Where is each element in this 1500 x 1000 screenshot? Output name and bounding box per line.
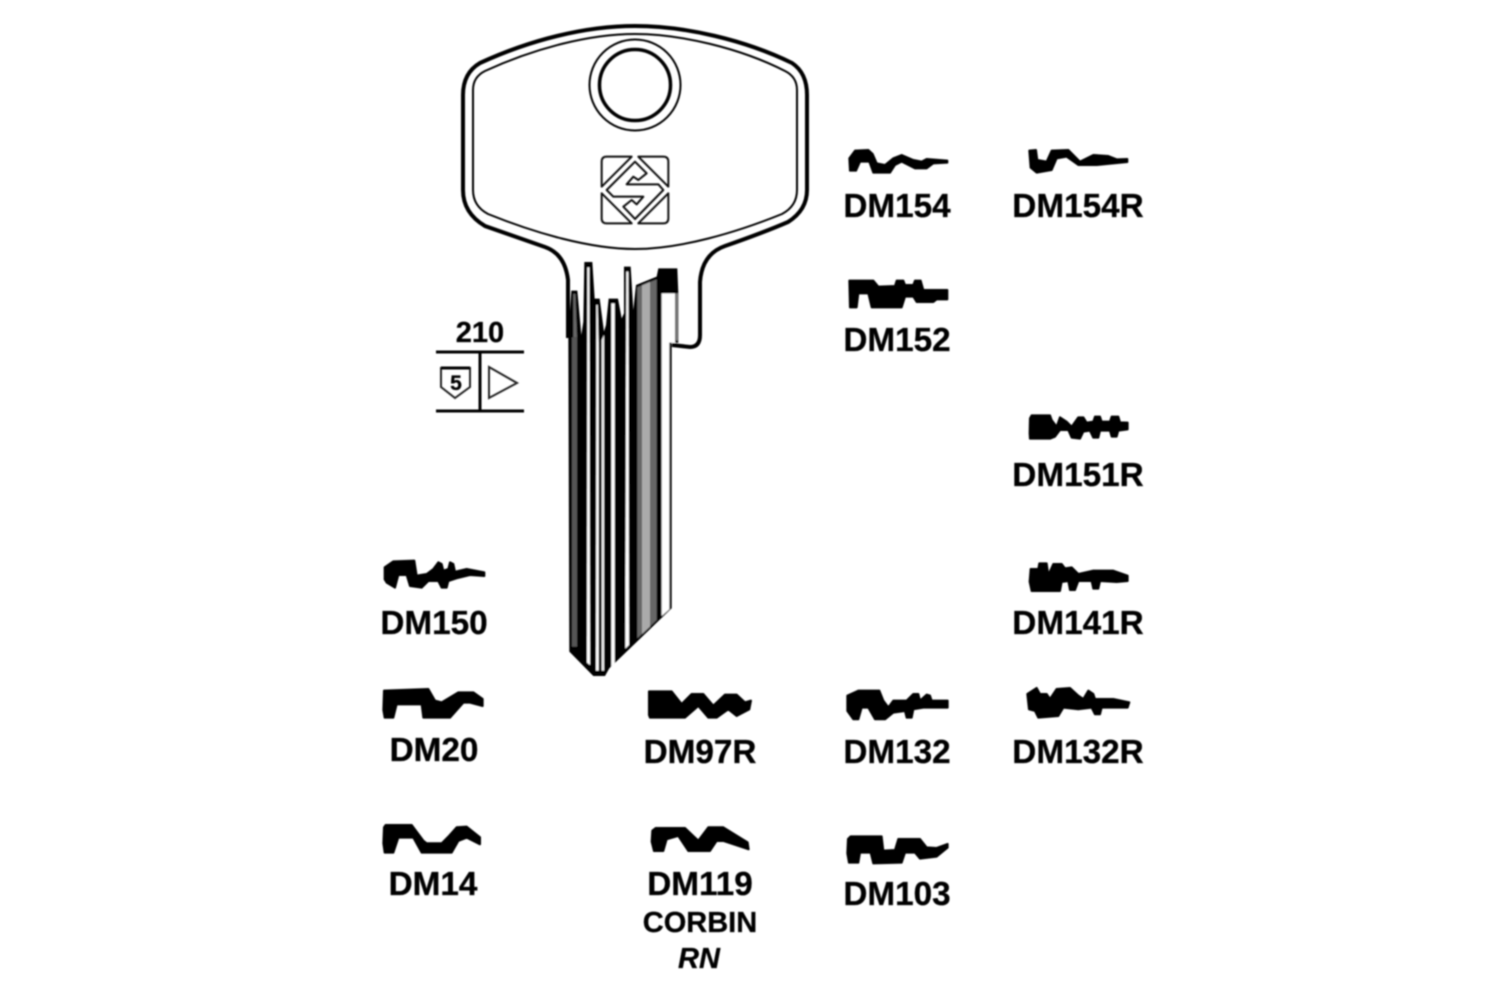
profile DM132R (1012, 688, 1144, 771)
profile DM154 (843, 150, 951, 225)
profile DM20: DM20 (390, 732, 478, 769)
shield icon: 5 (450, 372, 462, 395)
profile DM151R: DM151R (1012, 457, 1144, 494)
profile DM141R (1012, 563, 1144, 642)
triangle icon (489, 367, 517, 398)
profile DM150 (380, 561, 488, 642)
profile DM14 (383, 825, 480, 903)
profile DM152 (843, 281, 951, 359)
key head outline (463, 26, 807, 347)
profile DM154R (1012, 150, 1144, 225)
profile DM119 with CORBIN RN: RN (678, 943, 721, 975)
key illustration (463, 26, 807, 676)
profile DM97R: DM97R (644, 734, 756, 771)
profile DM119 with CORBIN RN (643, 827, 757, 975)
number 210: 210 (456, 317, 504, 349)
profile DM151R (1012, 415, 1144, 494)
profile DM150: DM150 (380, 605, 488, 642)
profile DM119 with CORBIN RN: CORBIN (643, 907, 757, 939)
profile DM154R: DM154R (1012, 188, 1144, 225)
profile DM154: DM154 (843, 188, 951, 225)
cut code symbol 210 (436, 317, 524, 411)
profile DM103 (843, 836, 951, 913)
key blade (568, 262, 678, 676)
profile DM152: DM152 (843, 322, 951, 359)
symbol frame (436, 352, 524, 411)
profile DM103: DM103 (843, 876, 951, 913)
profile DM132 (843, 691, 951, 771)
profile DM132R: DM132R (1012, 734, 1144, 771)
profile DM141R: DM141R (1012, 605, 1144, 642)
profile DM20 (383, 689, 483, 769)
logo (602, 157, 668, 223)
profile DM14: DM14 (389, 866, 478, 903)
profile DM132: DM132 (843, 734, 951, 771)
profile DM119 with CORBIN RN: DM119 (647, 866, 753, 903)
profile DM97R (644, 691, 756, 771)
